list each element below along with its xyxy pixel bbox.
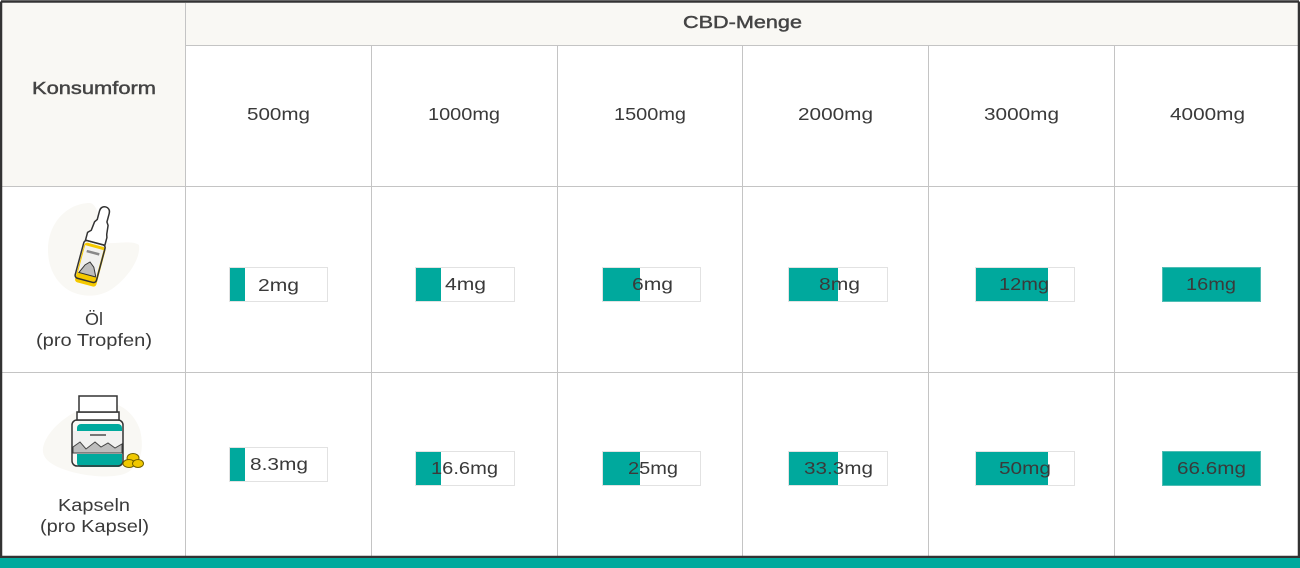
bar: 33.3mg: 33.3mg [804, 458, 873, 478]
bar: 6mg: 6mg [632, 274, 673, 294]
header background: Konsumform [2, 3, 185, 186]
column headings: 1500mg [614, 104, 686, 124]
row label: Kapseln (pro Kapsel): Kapseln [58, 495, 130, 515]
bar: 66.6mg: 66.6mg [1177, 458, 1246, 478]
bar: 2mg [229, 267, 328, 302]
row label: Kapseln (pro Kapsel): (pro Kapsel) [40, 516, 149, 536]
bar: 16mg: 16mg [1186, 274, 1236, 294]
bar: 66.6mg [1162, 451, 1261, 486]
bar: 6mg [602, 267, 700, 302]
bar: 16mg [1162, 267, 1261, 302]
row label: Öl (pro Tropfen) [36, 309, 152, 350]
row label: Öl (pro Tropfen): (pro Tropfen) [36, 330, 152, 350]
footer band [0, 558, 1300, 568]
bar: 8mg: 8mg [819, 274, 860, 294]
bar: 50mg: 50mg [999, 458, 1051, 478]
column headings [247, 104, 1245, 124]
bar: 16.6mg [416, 451, 514, 486]
column headings: 500mg [247, 104, 310, 124]
bar: 8mg [788, 267, 888, 302]
bar: 4mg [416, 267, 514, 302]
column headings: 2000mg [798, 104, 873, 124]
bar: 25mg [602, 451, 700, 486]
bar: 8.3mg: 8.3mg [250, 454, 308, 474]
header background: CBD-Menge [185, 3, 1298, 45]
column headings: 4000mg [1170, 104, 1245, 124]
icon: capsule jar [43, 396, 144, 476]
bar: 12mg: 12mg [999, 274, 1049, 294]
bar: 2mg: 2mg [258, 275, 299, 295]
row label: Kapseln (pro Kapsel) [40, 495, 149, 536]
row 2 bars [229, 447, 1261, 486]
bar: 4mg: 4mg [445, 274, 486, 294]
column headings: 3000mg [984, 104, 1059, 124]
column headings: 1000mg [428, 104, 500, 124]
row label: Öl (pro Tropfen): Öl [85, 309, 103, 329]
heading: Konsumform: Konsumform [32, 78, 156, 98]
bar: 16.6mg: 16.6mg [431, 458, 498, 478]
row 1 bars [229, 267, 1261, 302]
heading: CBD-Menge: CBD-Menge [683, 12, 802, 32]
bar: 25mg: 25mg [628, 458, 678, 478]
icon: oil dropper bottle [48, 203, 139, 296]
bar: 12mg [976, 267, 1074, 302]
bar: 33.3mg [788, 451, 888, 486]
bar: 50mg [976, 451, 1074, 486]
bar: 8.3mg [229, 447, 328, 482]
